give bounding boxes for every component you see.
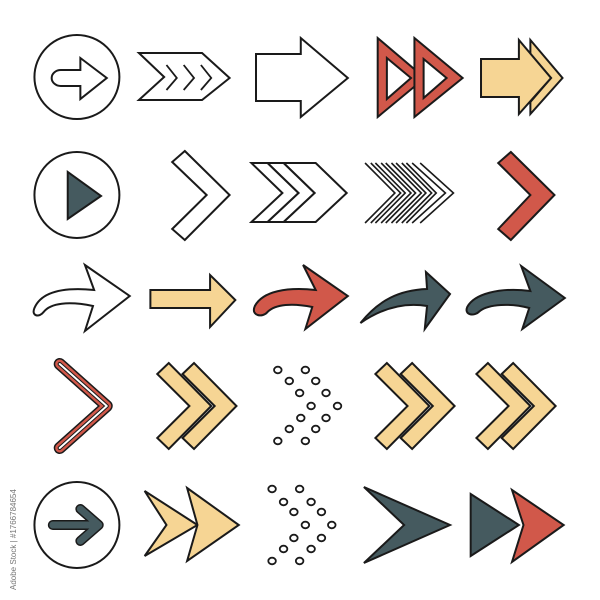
icon: big outline arrow xyxy=(256,38,348,117)
row 2 xyxy=(34,151,554,240)
row 1 xyxy=(34,35,563,119)
icon: circle outline arrow xyxy=(34,35,119,119)
icon: dark curved arrow 2 xyxy=(467,266,565,329)
icon: white curved arrow xyxy=(34,265,130,331)
icon: dark arrowhead xyxy=(364,487,450,563)
icon: yellow double chevron 3 xyxy=(476,363,556,449)
icon: outline chevron xyxy=(172,151,230,240)
icon: triple chevrons xyxy=(251,163,347,222)
icon: dark and red triangles xyxy=(471,490,564,562)
row 5 xyxy=(34,482,564,568)
watermark text: Adobe Stock | #1766784654 xyxy=(9,489,18,590)
icon: yellow double chevron 2 xyxy=(375,363,455,449)
icon: yellow double chevron xyxy=(157,363,236,449)
icon: red chevron xyxy=(498,152,554,240)
icon: play circle xyxy=(34,152,119,238)
icon: dark curved arrow xyxy=(360,272,450,329)
icon: yellow straight arrow xyxy=(150,275,235,327)
icon grid xyxy=(34,35,565,568)
icon: chevron banner xyxy=(139,53,230,100)
icon: red outlined chevron xyxy=(60,364,107,448)
icon: dots chevron 2 xyxy=(268,486,336,564)
icon: dots chevron xyxy=(274,367,341,444)
icon: yellow double triangle arrow xyxy=(145,488,239,561)
icon: yellow arrow xyxy=(481,40,563,114)
icon: red double triangle xyxy=(378,38,463,117)
icon: thin multi chevrons xyxy=(365,163,453,223)
row 4 xyxy=(60,363,556,449)
icon: red curved arrow xyxy=(254,265,348,329)
icon: circle dark arrow xyxy=(34,482,119,568)
row 3 xyxy=(34,265,565,331)
